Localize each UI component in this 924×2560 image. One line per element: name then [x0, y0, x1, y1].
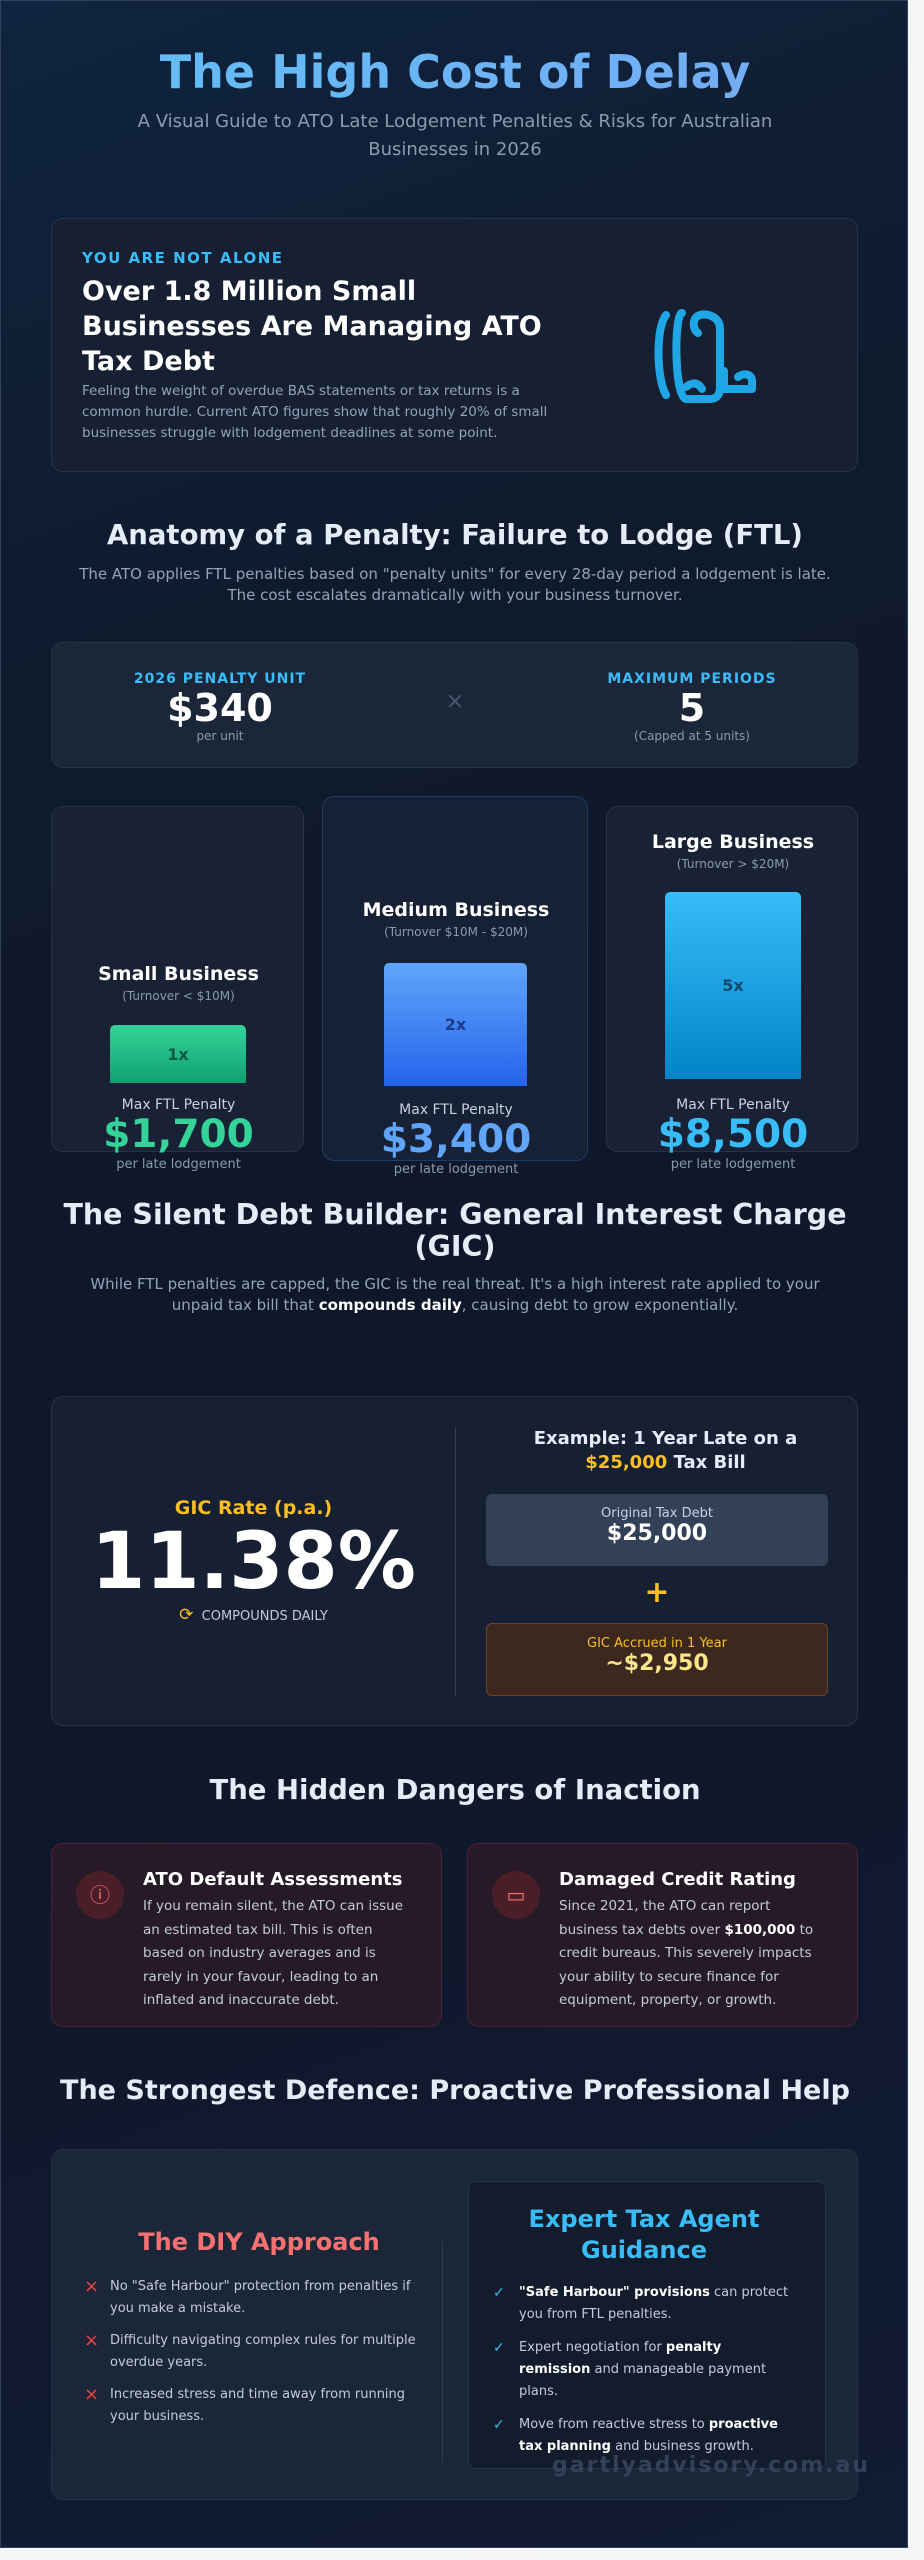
DIY column: No "Safe Harbour" protection from penalties if you make a mistake. [110, 2279, 410, 2316]
text: per late lodgement [394, 1162, 518, 1177]
bar: 1x: 1x [167, 1044, 189, 1064]
stat: penalty unit [134, 671, 306, 743]
icon: hand with money [654, 309, 756, 403]
text: anatomy intro: The cost escalates dramatically with your business turnover. [227, 586, 683, 604]
panel: medium business: Medium Business [363, 899, 549, 921]
expert column: Move from reactive stress to proactive tax planning and business growth. [519, 2417, 778, 2454]
expert column: ✓ [493, 2340, 505, 2356]
eyebrow: YOU ARE NOT ALONE [82, 249, 284, 267]
heading: GIC: (GIC) [415, 1230, 495, 1263]
panel: small business: (Turnover < $10M) [122, 989, 235, 1003]
subtitle: Businesses in 2026 [368, 139, 542, 160]
bar: 5x [665, 892, 801, 1079]
icon: multiply: × [446, 689, 464, 714]
stat: max periods: (Capped at 5 units) [634, 729, 750, 743]
panel: medium business [322, 796, 588, 1161]
bar: 1x [110, 1025, 246, 1083]
stat: GIC rate: 11.38% [91, 1517, 416, 1607]
expert column: ✓ [493, 2417, 505, 2433]
text: anatomy intro: The ATO applies FTL penalties based on "penalty units" for every 28-day period a lodgement is late. [79, 565, 831, 583]
panel: default assessments [51, 1843, 442, 2027]
heading: hidden dangers: The Hidden Dangers of Inaction [209, 1774, 701, 1806]
panel: large business: $8,500 [658, 1112, 808, 1157]
icon: question [76, 1871, 124, 1919]
DIY column: × [84, 2384, 99, 2405]
text: GIC intro [90, 1275, 820, 1314]
DIY column: The DIY Approach [138, 2228, 380, 2256]
box: original debt [486, 1494, 828, 1566]
expert column: ✓ [493, 2285, 505, 2301]
panel: default assessments: ATO Default Assessments [143, 1869, 402, 1890]
panel: GIC [51, 1396, 858, 1726]
expert column: Expert negotiation for penalty remission and manageable payment plans. [519, 2340, 766, 2399]
bar: 2x: 2x [445, 1015, 466, 1034]
text: per late lodgement [116, 1157, 241, 1172]
panel: credit rating: Since 2021, the ATO can report business tax debts over $100,000 to credit bureaus. This severely impacts your ability to secure finance for equipment, property, or growth. [559, 1898, 813, 2008]
box: GIC accrued: GIC Accrued in 1 Year [587, 1636, 727, 1651]
panel: small business [51, 806, 304, 1152]
icon: plus: + [644, 1575, 670, 1610]
panel: small business: Max FTL Penalty [122, 1097, 235, 1113]
expert column: Guidance [581, 2236, 707, 2264]
heading: anatomy: Anatomy of a Penalty: Failure to Lodge (FTL) [107, 519, 803, 551]
panel: default assessments: If you remain silent, the ATO can issue an estimated tax bill. This is often based on industry averages and is rarely in your favour, leading to an inflated and inaccurate debt. [143, 1898, 403, 2008]
DIY column: × [84, 2330, 99, 2351]
panel: medium business: Max FTL Penalty [399, 1102, 513, 1118]
stat: max periods: 5 [679, 686, 705, 730]
stat: penalty unit: 2026 PENALTY UNIT [134, 671, 306, 687]
panel: medium business: (Turnover $10M - $20M) [384, 925, 528, 939]
text: GIC intro: unpaid tax bill that compounds daily, causing debt to grow exponentially. [172, 1296, 738, 1314]
box: original debt: Original Tax Debt [601, 1506, 713, 1521]
bar: 5x: 5x [722, 976, 744, 995]
panel: not alone [51, 218, 858, 472]
box: GIC accrued [486, 1623, 828, 1696]
icon: question: ⓘ [90, 1883, 110, 1907]
icon: card [492, 1871, 540, 1919]
title [1, 45, 909, 99]
text: anatomy intro [79, 565, 831, 604]
panel: defence comparison [51, 2149, 858, 2500]
panel: penalty unit formula [51, 642, 858, 768]
expert column: Expert Tax Agent [529, 2205, 759, 2233]
DIY column [84, 2228, 416, 2424]
panel: large business: (Turnover > $20M) [677, 857, 789, 871]
stat: GIC rate: ⟳ COMPOUNDS DAILY [179, 1605, 328, 1625]
DIY column: × [84, 2276, 99, 2297]
DIY column: Difficulty navigating complex rules for multiple overdue years. [110, 2333, 416, 2370]
box: GIC accrued: ~$2,950 [605, 1651, 709, 1676]
stat: penalty unit: $340 [167, 686, 273, 730]
stat: penalty unit: per unit [196, 729, 244, 743]
panel: large business: Large Business [652, 831, 814, 853]
text: per late lodgement [671, 1157, 795, 1172]
body text: Feeling the weight of overdue BAS statements or tax returns is a common hurdle. Current ATO figures show that roughly 20% of small businesses struggle with lodgement deadlines at some point. [82, 383, 547, 441]
bar: 2x [384, 963, 527, 1086]
panel: credit rating: Damaged Credit Rating [559, 1869, 796, 1890]
subtitle: A Visual Guide to ATO Late Lodgement Penalties & Risks for Australian [138, 111, 772, 132]
panel: large business: Max FTL Penalty [676, 1097, 790, 1113]
panel: medium business: $3,400 [381, 1117, 531, 1162]
icon: card: ▭ [507, 1883, 525, 1907]
text: GIC intro: While FTL penalties are capped, the GIC is the real threat. It's a high interest rate applied to your [90, 1275, 820, 1293]
box: original debt: $25,000 [607, 1521, 707, 1546]
panel: small business: $1,700 [103, 1112, 254, 1157]
stat: max periods: MAXIMUM PERIODS [607, 671, 777, 687]
expert column: "Safe Harbour" provisions can protect you from FTL penalties. [519, 2285, 788, 2322]
panel: credit rating [467, 1843, 858, 2027]
stat: GIC rate: GIC Rate (p.a.) [175, 1497, 332, 1519]
panel: small business: Small Business [98, 963, 259, 985]
example calc [534, 1428, 797, 1473]
subtitle [138, 111, 772, 160]
title: The High Cost of Delay [160, 45, 750, 99]
example calc: $25,000 Tax Bill [585, 1452, 746, 1473]
expert column [468, 2181, 826, 2469]
heading: GIC [63, 1198, 847, 1263]
example calc: Example: 1 Year Late on a [534, 1428, 797, 1449]
panel: large business [606, 806, 858, 1152]
heading: GIC: The Silent Debt Builder: General Interest Charge [63, 1198, 847, 1231]
watermark: gartlyadvisory.com.au [552, 2453, 870, 2478]
stat: max periods [607, 671, 777, 743]
heading: Over 1.8 Million Small Businesses Are Managing ATO Tax Debt [82, 276, 542, 377]
DIY column: Increased stress and time away from running your business. [110, 2387, 405, 2424]
heading: defence: The Strongest Defence: Proactive Professional Help [60, 2075, 850, 2106]
